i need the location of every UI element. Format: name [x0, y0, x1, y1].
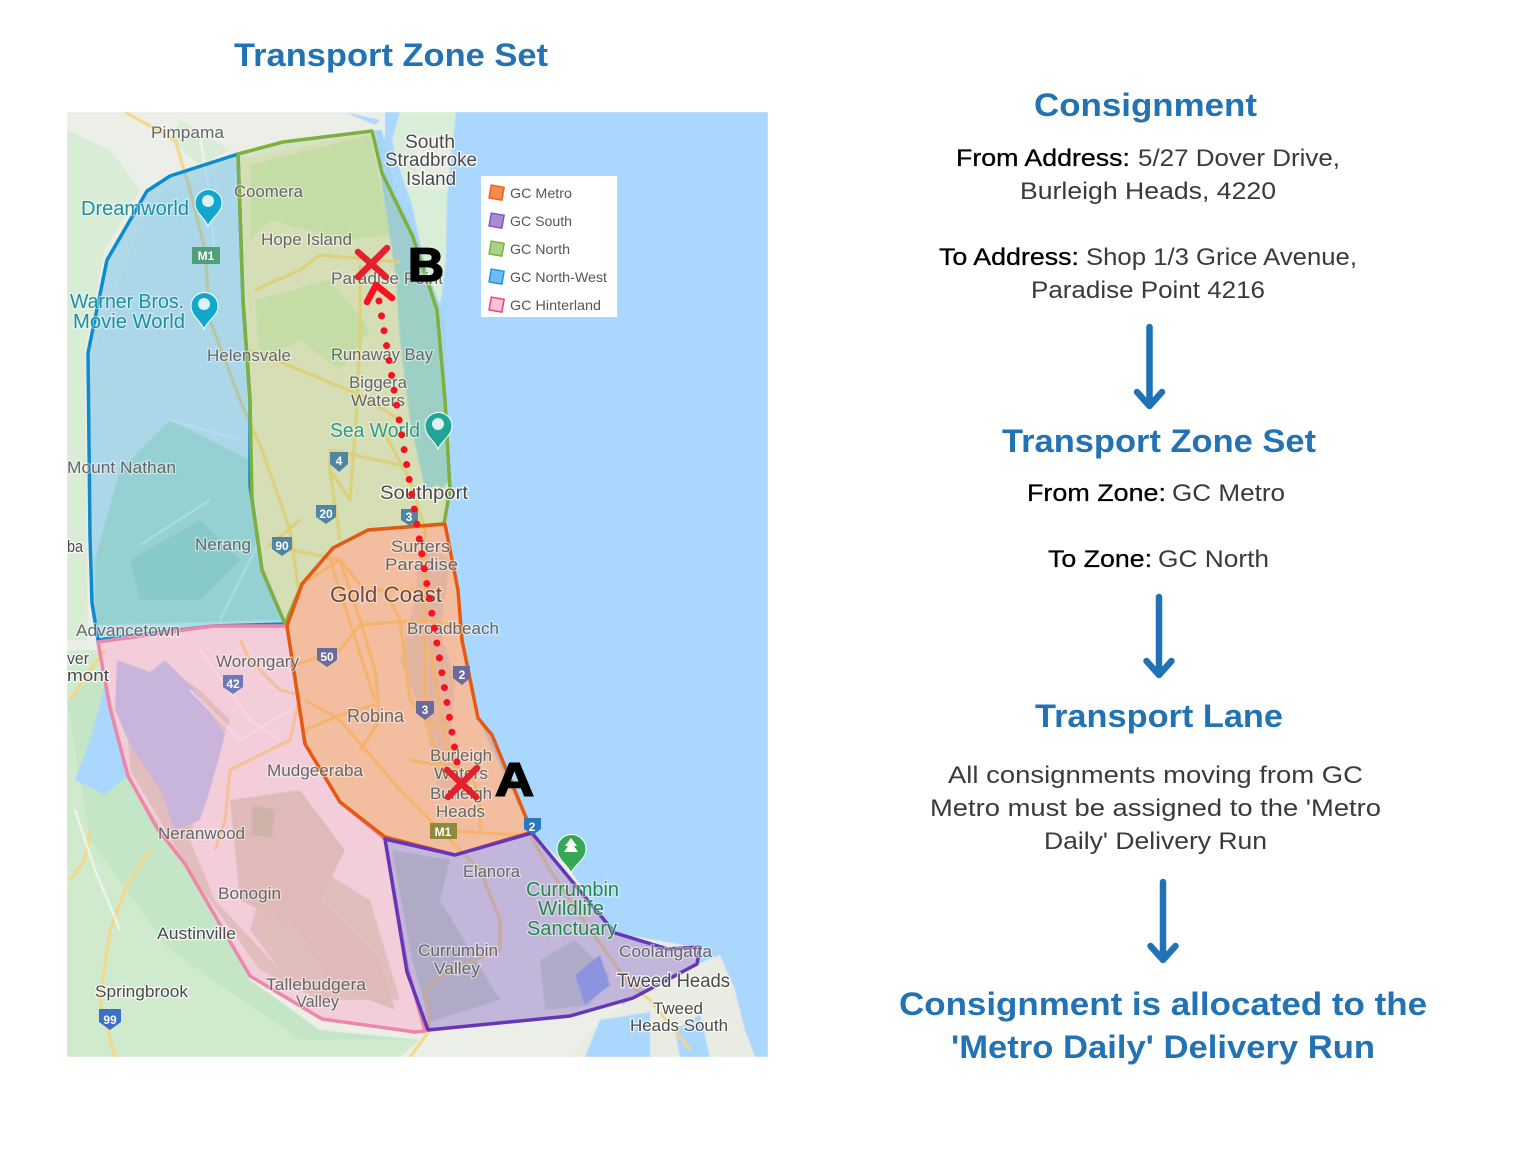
conclusion heading: 'Metro Daily' Delivery Run — [951, 1029, 1375, 1065]
map place labels: Robina — [347, 706, 405, 726]
highway shields: 3 — [422, 703, 429, 717]
broadwater water — [374, 130, 450, 490]
roads — [70, 112, 690, 1057]
highway shields: 90 — [275, 539, 289, 553]
map place labels: Heads South — [630, 1016, 728, 1035]
map place labels: Austinville — [157, 924, 236, 943]
zone: GC North-West — [88, 154, 285, 640]
map place labels: Pimpama — [151, 123, 225, 142]
map place labels: ba — [67, 537, 83, 556]
map place labels: Island — [406, 169, 456, 190]
map place labels: Valley — [434, 959, 481, 978]
lane description: Metro must be assigned to the 'Metro — [930, 795, 1381, 822]
map place labels: Southport — [380, 483, 469, 504]
conclusion heading: Consignment is allocated to the — [899, 986, 1427, 1022]
highway shields: 20 — [319, 507, 333, 521]
map place labels: Wildlife — [538, 898, 604, 920]
map place labels: Neranwood — [158, 824, 245, 843]
north land — [240, 132, 450, 620]
highway shields: 50 — [320, 650, 334, 664]
consignment addresses: To Address: — [939, 244, 1079, 271]
map place labels: Valley — [296, 992, 339, 1011]
map place labels: Burleigh — [430, 784, 492, 803]
marker X at A — [447, 768, 477, 797]
map place labels: Nerang — [195, 535, 251, 554]
heading: Consignment: Consignment — [1034, 87, 1257, 123]
map place labels: Gold Coast — [330, 582, 442, 607]
legend item: GC North: GC North — [510, 241, 570, 257]
map place labels: Coolangatta — [619, 942, 713, 961]
map place labels: South — [405, 132, 455, 153]
highway shields: M1 — [435, 825, 452, 839]
legend item: GC South: GC South — [510, 213, 572, 229]
map place labels: Warner Bros. — [70, 291, 184, 313]
conclusion heading — [899, 986, 1427, 1065]
zone: GC Metro — [287, 524, 532, 855]
highway shields: 4 — [336, 454, 343, 468]
map place labels: Surfers — [391, 537, 450, 556]
map place labels — [67, 123, 730, 1035]
map place labels: Advancetown — [76, 621, 180, 640]
map place labels: Tallebudgera — [266, 975, 367, 994]
zone details: From Zone: — [1027, 480, 1166, 507]
lane description: Daily' Delivery Run — [1044, 828, 1267, 855]
highway shields: 99 — [103, 1013, 117, 1027]
map place labels: Bonogin — [218, 884, 281, 903]
legend item: GC Metro: GC Metro — [510, 185, 572, 201]
map place labels: Mudgeeraba — [267, 761, 364, 780]
south land — [620, 934, 698, 1000]
map place labels: Burleigh — [430, 746, 492, 765]
hinterland land — [102, 650, 180, 855]
metro land — [290, 524, 530, 855]
highway shields: 2 — [459, 668, 466, 682]
lane description: All consignments moving from GC — [948, 762, 1363, 789]
legend — [481, 176, 617, 317]
map place labels: Helensvale — [207, 346, 291, 365]
label A: A — [495, 753, 534, 806]
zone details: GC Metro — [1172, 480, 1285, 507]
hinze dam — [115, 660, 225, 830]
map place labels: Waters — [434, 764, 488, 783]
lane description — [930, 762, 1381, 855]
map place labels: Sanctuary — [527, 918, 617, 940]
map place labels: Sea World — [330, 420, 420, 442]
route arrowhead — [367, 285, 392, 302]
map place labels: Hope Island — [261, 230, 352, 249]
map place labels: Currumbin — [418, 941, 498, 960]
zone details: GC North — [1158, 546, 1269, 573]
consignment addresses — [939, 145, 1357, 304]
map place labels: Worongary — [216, 652, 299, 671]
legend item: GC North-West: GC North-West — [510, 269, 607, 285]
map place labels: Tweed — [653, 999, 703, 1018]
map place labels: Tweed Heads — [617, 971, 730, 992]
map place labels: Runaway Bay — [331, 345, 433, 364]
consignment addresses: From Address: — [956, 145, 1130, 172]
dotted route — [379, 301, 457, 762]
map place labels: Currumbin — [526, 879, 619, 901]
heading: Transport Zone Set: Transport Zone Set — [1002, 423, 1316, 459]
marker X at B — [358, 248, 387, 277]
highway shields: M1 — [198, 249, 215, 263]
zone: GC Hinterland — [98, 626, 425, 1032]
base map — [67, 112, 768, 1057]
map place labels: Mount Nathan — [67, 458, 176, 477]
arrow 1 — [1137, 327, 1162, 406]
highway shields: 3 — [406, 510, 413, 524]
map place labels: Paradise — [385, 555, 458, 574]
map place labels: Paradise Point — [331, 269, 443, 288]
consignment addresses: Burleigh Heads, 4220 — [1020, 178, 1276, 205]
map place labels: Movie World — [73, 311, 185, 333]
consignment addresses: 5/27 Dover Drive, — [1138, 145, 1340, 172]
stradbroke island — [392, 112, 456, 305]
consignment addresses: Shop 1/3 Grice Avenue, — [1086, 244, 1357, 271]
map place labels: Waters — [351, 391, 405, 410]
highway shields: 42 — [226, 677, 240, 691]
map place labels: ver — [67, 649, 89, 668]
map place labels: Elanora — [463, 862, 521, 881]
highway shields: 2 — [529, 820, 536, 834]
zone: GC South — [385, 833, 700, 1030]
map panel — [67, 112, 768, 1057]
label B: B — [408, 238, 444, 291]
map place labels: Stradbroke — [385, 150, 477, 171]
arrow 3 — [1150, 882, 1176, 960]
canals — [400, 540, 470, 800]
map place labels: Heads — [436, 802, 485, 821]
north-west land — [90, 160, 285, 625]
arrow 2 — [1146, 597, 1172, 675]
map place labels: Broadbeach — [407, 619, 499, 638]
zone details: To Zone: — [1048, 546, 1152, 573]
zone details — [1027, 480, 1285, 573]
heading: Transport Lane: Transport Lane — [1035, 698, 1283, 734]
legend item: GC Hinterland: GC Hinterland — [510, 297, 601, 313]
map pins — [191, 190, 586, 873]
map place labels: Coomera — [234, 182, 304, 201]
zone: GC North — [238, 131, 450, 624]
map place labels: mont — [67, 666, 109, 685]
highway shields — [99, 247, 541, 1030]
consignment addresses: Paradise Point 4216 — [1031, 277, 1265, 304]
map place labels: Dreamworld — [81, 198, 189, 220]
map place labels: Biggera — [349, 373, 408, 392]
tweed land — [622, 954, 756, 1057]
title: Transport Zone Set — [234, 37, 548, 73]
map place labels: Springbrook — [95, 982, 189, 1001]
